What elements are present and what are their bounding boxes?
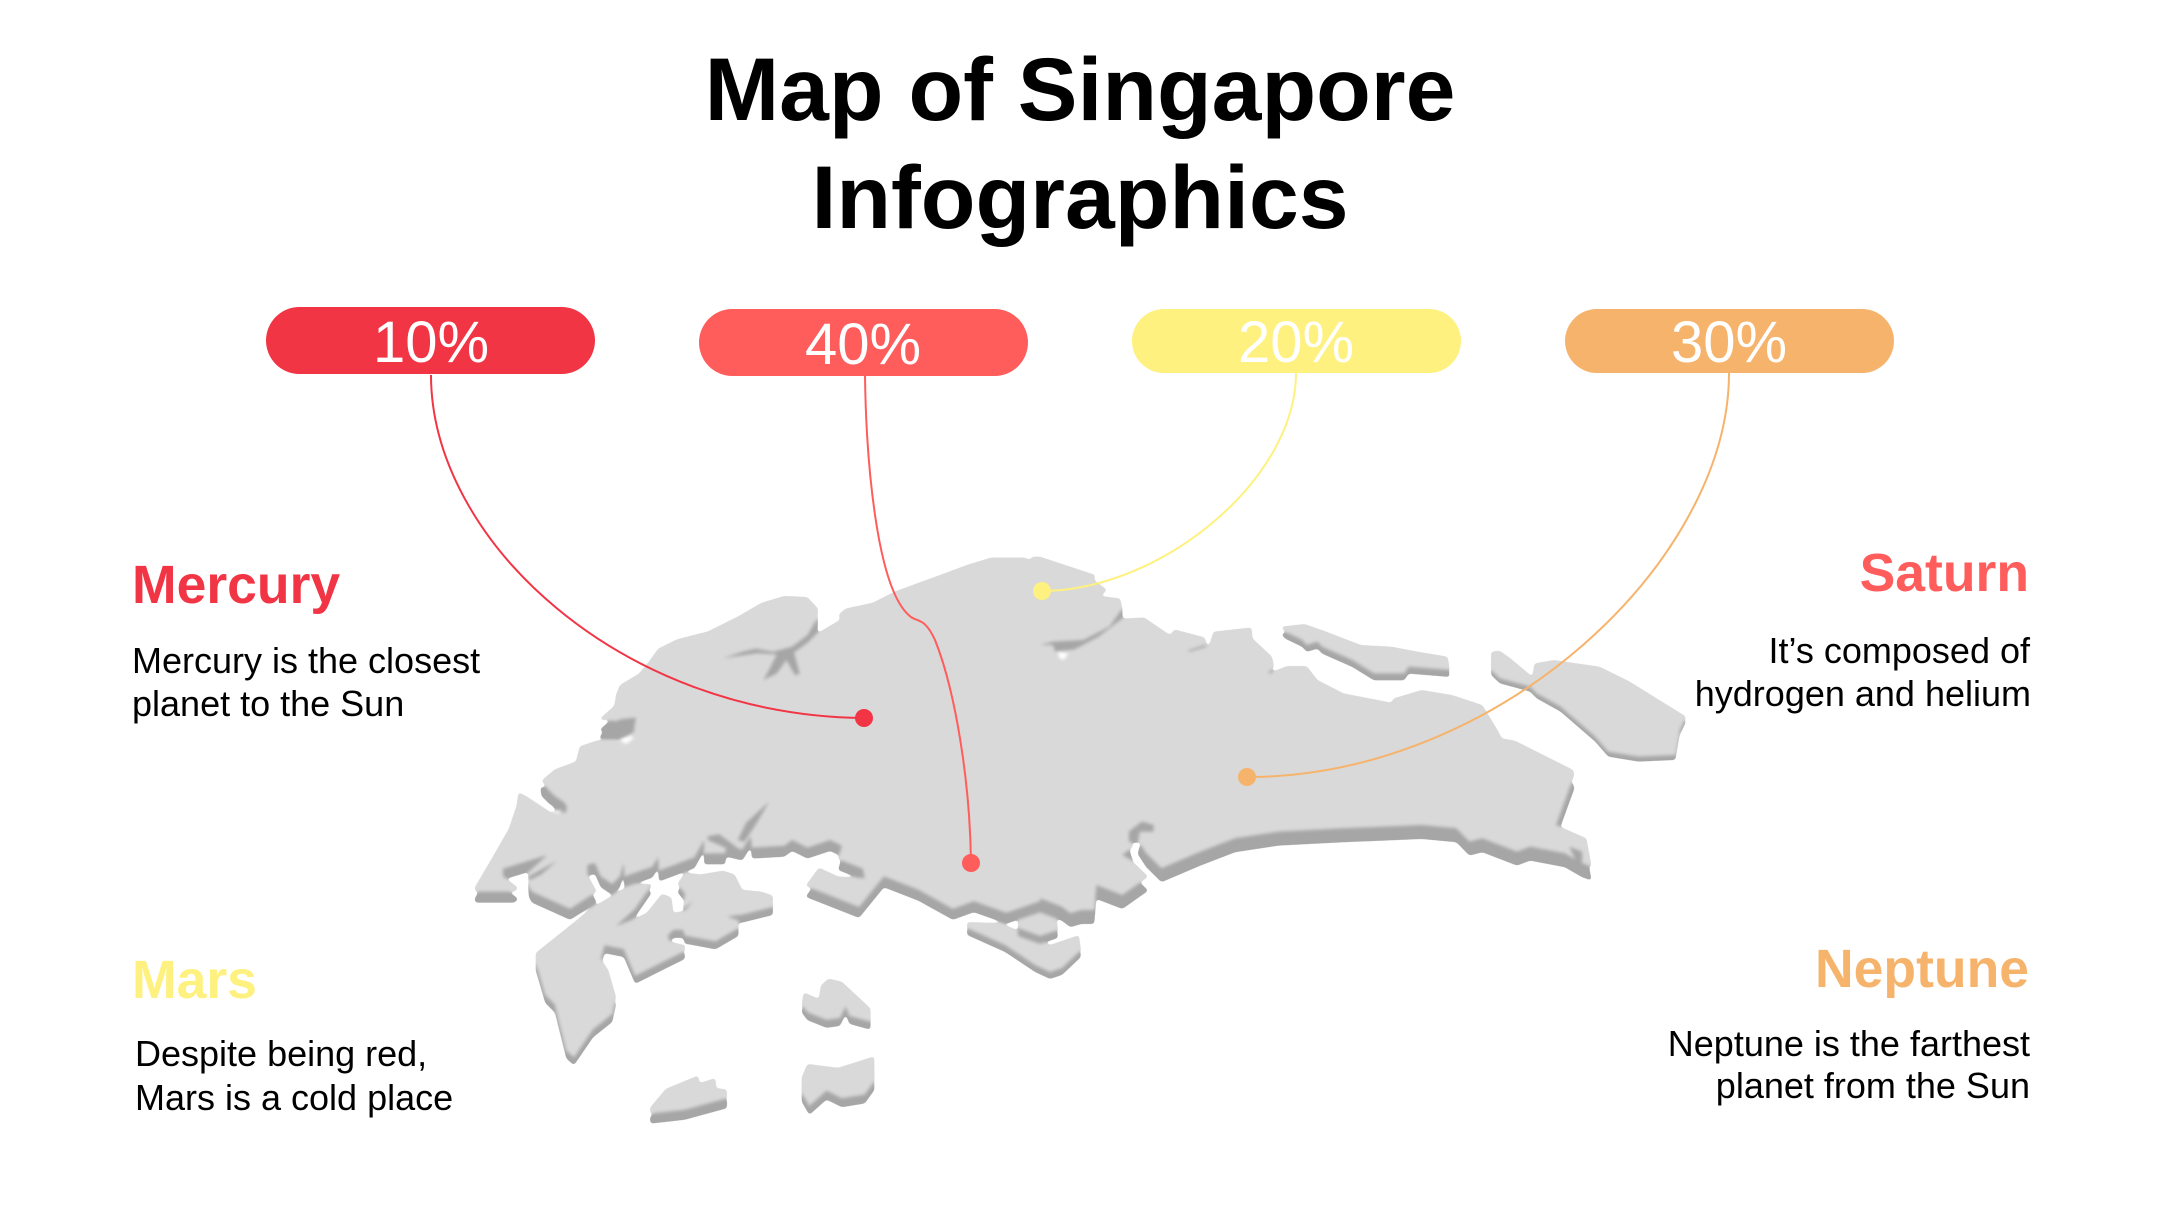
text block: Saturn: Saturn	[1860, 544, 2029, 603]
map dot: red	[855, 709, 873, 727]
title: Map of Singapore	[705, 39, 1455, 139]
connector: 20% to yellow point	[1042, 373, 1296, 591]
pill: 20%	[1132, 309, 1461, 375]
pill: 20%: 20%	[1238, 310, 1354, 375]
text block: Mars: Mars is a cold place	[135, 1077, 453, 1118]
text block: Mercury: Mercury	[132, 556, 340, 615]
connector: 30% to orange point	[1247, 373, 1729, 777]
text block: Mercury	[132, 556, 480, 724]
map dot: yellow	[1033, 582, 1051, 600]
connector: 40% to Mars point	[865, 376, 971, 863]
text block: Neptune	[1668, 940, 2030, 1106]
text block: Saturn	[1695, 544, 2031, 714]
text block: Mars: Mars	[132, 951, 257, 1010]
map dot: coral	[962, 854, 980, 872]
pill: 40%	[699, 309, 1028, 377]
connector: 10% to Mercury point	[431, 375, 864, 718]
text block: Saturn: It’s composed of	[1769, 630, 2031, 671]
title	[705, 39, 1455, 247]
island: western island group	[536, 871, 773, 1065]
main island	[474, 557, 1592, 927]
text block: Mars: Despite being red,	[135, 1033, 427, 1074]
text block: Neptune: Neptune is the farthest	[1668, 1023, 2030, 1064]
pill: 40%: 40%	[805, 312, 921, 377]
text block: Neptune: Neptune	[1815, 940, 2029, 999]
text block: Neptune: planet from the Sun	[1716, 1065, 2030, 1106]
map dot: orange	[1238, 768, 1256, 786]
pill: 10%: 10%	[373, 310, 489, 375]
title: Infographics	[811, 147, 1349, 247]
island: southern small islands	[650, 907, 1081, 1124]
text block: Saturn: hydrogen and helium	[1695, 673, 2031, 714]
text block: Mercury: planet to the Sun	[132, 683, 404, 724]
pill: 10%	[266, 307, 595, 375]
text block: Mercury: Mercury is the closest	[132, 640, 480, 681]
map of Singapore	[474, 557, 1686, 1124]
pill: 30%: 30%	[1671, 310, 1787, 375]
text block: Mars	[132, 951, 453, 1118]
island: north-east islands	[1281, 624, 1686, 762]
pill: 30%	[1565, 309, 1894, 375]
